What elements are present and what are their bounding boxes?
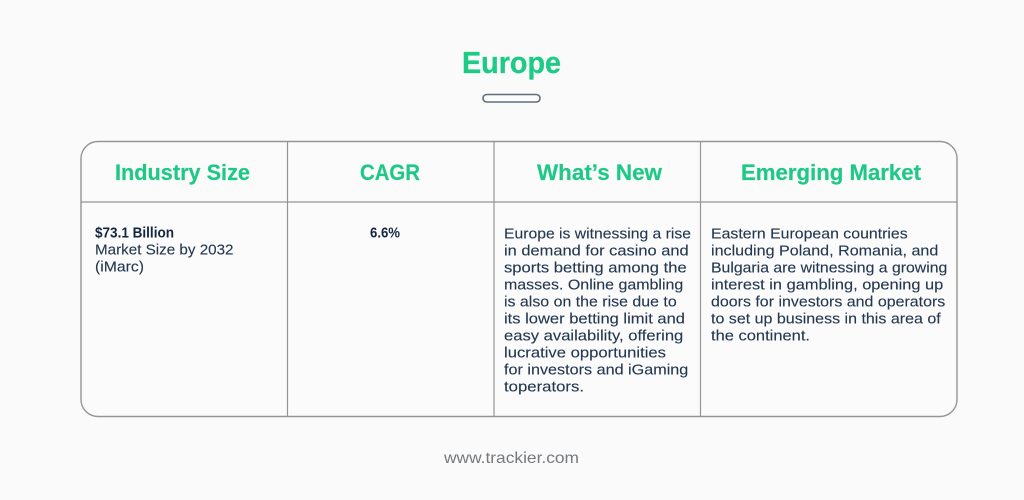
title underline pill: [483, 94, 540, 102]
table grid lines: [81, 142, 957, 416]
what's new text: easy availability, offering: [504, 328, 683, 344]
column header: Emerging Market: Emerging Market: [741, 160, 922, 185]
CAGR value: 6.6%: [370, 224, 400, 242]
emerging market text: Bulgaria are witnessing a growing: [711, 260, 947, 276]
emerging market text: to set up business in this area of: [711, 310, 942, 328]
what's new text: for investors and iGaming: [504, 362, 688, 378]
industry size text: (iMarc): [95, 258, 144, 276]
column header: CAGR: CAGR: [360, 160, 420, 185]
table: [81, 142, 957, 416]
emerging market text: the continent.: [711, 328, 810, 344]
emerging market text: [711, 226, 947, 344]
column header: What's New: What’s New: [537, 160, 663, 185]
what's new text: is also on the rise due to: [504, 294, 677, 310]
what's new text: toperators.: [504, 378, 584, 396]
emerging market text: interest in gambling, opening up: [711, 276, 943, 294]
footer website: www.trackier.com: [443, 450, 579, 467]
emerging market text: Eastern European countries: [711, 226, 908, 242]
industry size text: [95, 224, 234, 276]
emerging market text: doors for investors and operators: [711, 294, 945, 310]
title: Europe: [462, 45, 561, 80]
what's new text: sports betting among the: [504, 260, 687, 276]
what's new text: [504, 226, 691, 396]
what's new text: its lower betting limit and: [504, 310, 685, 328]
what's new text: in demand for casino and: [504, 242, 689, 260]
industry size text: Market Size by 2032: [95, 242, 234, 258]
what's new text: lucrative opportunities: [504, 344, 666, 362]
emerging market text: including Poland, Romania, and: [711, 242, 938, 260]
industry size text: $73.1 Billion: [95, 224, 174, 242]
table frame: [81, 142, 957, 416]
what's new text: Europe is witnessing a rise: [504, 226, 691, 242]
column header: Industry Size: Industry Size: [115, 160, 250, 185]
what's new text: masses. Online gambling: [504, 276, 683, 294]
